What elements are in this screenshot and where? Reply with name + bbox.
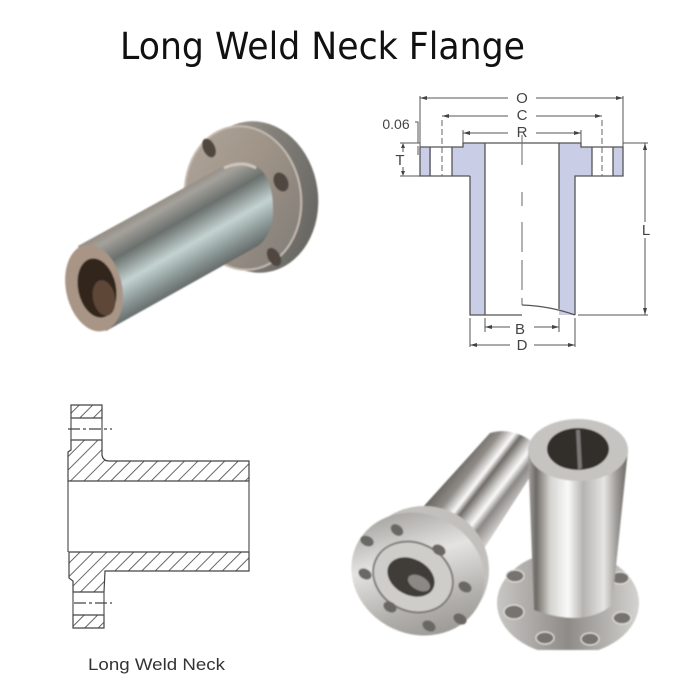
dimension lines <box>400 96 648 347</box>
flange face <box>176 119 310 277</box>
title: Long Weld Neck Flange <box>120 25 525 68</box>
dimension labels <box>382 90 650 354</box>
upright bore <box>547 428 609 470</box>
horizontal flange bore <box>380 549 442 605</box>
top flange hatch <box>71 405 102 418</box>
horizontal flange face <box>331 491 505 657</box>
dimension labels: B <box>515 321 525 338</box>
tube bore <box>72 255 122 321</box>
bore and flange outlines <box>68 418 249 615</box>
flange and neck section <box>420 143 485 315</box>
raised face ring <box>361 529 465 625</box>
dimension labels: T <box>395 152 405 169</box>
infographic canvas <box>64 30 650 674</box>
dimension labels: R <box>517 124 528 141</box>
hatched line drawing of long weld neck <box>68 405 249 628</box>
bottom flange hatch <box>73 615 104 628</box>
drawing caption: Long Weld Neck <box>88 655 226 674</box>
top hub and neck hatch <box>68 440 249 481</box>
bottom hub and neck hatch <box>69 552 249 592</box>
horizontal flange neck <box>423 431 530 558</box>
photo: pair of long weld neck flanges <box>331 419 639 657</box>
upright top face <box>528 419 628 481</box>
centre and bolt lines <box>442 120 602 305</box>
tube end face <box>57 239 131 337</box>
bolt holes <box>199 136 292 269</box>
dimension labels: C <box>517 107 528 124</box>
dimension labels: 0.06 <box>382 116 410 132</box>
upright neck <box>528 450 628 618</box>
horizontal flange bolt holes <box>356 522 474 634</box>
hub shoulder highlight <box>224 164 256 168</box>
photo: single long weld neck flange <box>57 113 328 337</box>
dimension labels: L <box>642 222 650 239</box>
bolt centre lines <box>68 429 112 603</box>
neck tube <box>78 162 273 331</box>
dimension arrowheads <box>401 96 647 347</box>
dimension labels: O <box>516 90 528 107</box>
dimension labels: D <box>517 337 528 354</box>
flange rim <box>184 113 328 281</box>
horizontal flange rim <box>359 506 489 634</box>
upright flange base <box>497 551 639 655</box>
dimensioned cross-section diagram <box>382 90 650 354</box>
